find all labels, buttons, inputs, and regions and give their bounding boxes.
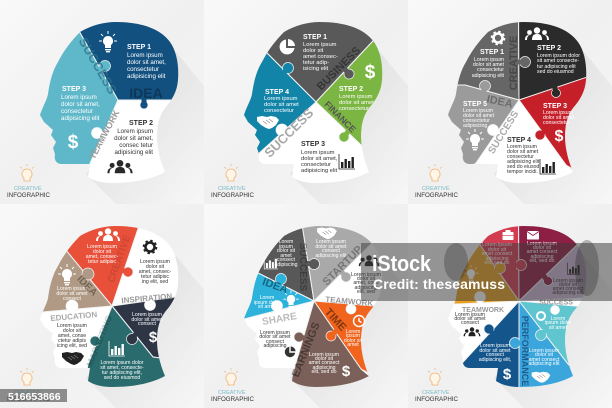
step 3 text: Lorem ipsum (543, 110, 573, 116)
step 1 text: consectetur (477, 67, 504, 73)
text: cyan segment: ipsum dolor (545, 320, 572, 326)
logo: creative infographic (211, 368, 255, 403)
step 4 text: Lorem ipsum (507, 144, 537, 150)
text: dark gray segment: dolor sit (277, 248, 296, 254)
text: white left segment: Lorem ipsum (260, 330, 290, 336)
logo: creative infographic (415, 368, 459, 403)
text: tan segment: consect (63, 296, 81, 302)
text: orange segment: amet (347, 342, 359, 348)
icon: bulb (466, 129, 484, 150)
step 3 text: consectetur (301, 162, 331, 168)
icon: dollar: $ (149, 329, 158, 346)
word: SUCCESS: SUCCESS (76, 35, 120, 97)
text: red segment: Lorem ipsum (87, 244, 117, 250)
icon: gear (144, 241, 156, 253)
watermark: credit: Credit: theseamuss (373, 276, 505, 292)
text: dark gray segment: consect (277, 257, 295, 263)
word: IDEA: IDEA (74, 274, 99, 299)
text: white left segment: dolor sit (63, 328, 82, 334)
text: blue segment: Lorem ipsum (529, 348, 559, 354)
step 2 text: consec tetur (119, 142, 153, 149)
icon: ring (537, 312, 545, 320)
text: white right segment: adipiscing (354, 285, 378, 291)
text: teal segment: tur adipiscing elit, (102, 370, 142, 376)
step 5 text: consectetur (463, 118, 490, 124)
step 1 text: amet consec- (303, 54, 338, 60)
step 1 text: STEP 1 (127, 44, 151, 51)
text: white left segment: consect (266, 339, 284, 345)
panel: three-step head (8, 22, 204, 202)
step 1 text: dolor sit amet, (127, 59, 166, 66)
panel: six-segment head (8, 226, 204, 406)
step 2 text: Lorem ipsum dolor (537, 53, 580, 59)
text: white segment: consect (461, 320, 479, 326)
watermark: iStock: iStock (372, 251, 432, 276)
step 2 text: STEP 2 (129, 120, 153, 127)
text: cyan segment: Lorem (551, 316, 565, 322)
text: white right segment: Lorem ipsum (140, 259, 170, 265)
word: SHARE: SHARE (261, 311, 298, 328)
panel: eight-segment head (416, 226, 603, 406)
icon: bulb (58, 264, 76, 285)
text: white left segment: amet, conse (58, 333, 86, 339)
text: white right segment: tetur adipisc (141, 274, 169, 280)
text: brown segment: elit, sed do (311, 369, 337, 375)
text: dark gray segment: adipiscing (274, 262, 298, 268)
step 2 text: dolor sit amet, (114, 135, 153, 142)
step 5 text: STEP 5 (463, 101, 487, 108)
step 1 text: dolor sit (303, 48, 324, 54)
text: maroon segment: amet consect (527, 249, 558, 255)
icon: bars (568, 263, 580, 275)
icon: dollar: $ (365, 62, 376, 83)
word: SUCCESS: SUCCESS (261, 105, 317, 160)
icon: people (464, 327, 480, 336)
panel: seven-segment head (212, 226, 399, 406)
step 2 text: Lorem ipsum (117, 128, 153, 135)
text: red segment: adipiscing (485, 256, 509, 262)
step 4 text: Lorem ipsum (264, 96, 298, 102)
text: blue segment: dolor sit (535, 352, 554, 358)
word: SUCCESS: SUCCESS (486, 109, 522, 156)
text: blue segment: adipiscing elit (528, 361, 560, 367)
word: EDUCATION: EDUCATION (50, 310, 98, 323)
step 5 text: adipisicing (463, 123, 487, 129)
icon: dollar: $ (503, 366, 512, 383)
step 1 text: tetur adip- (303, 60, 329, 66)
watermark: image id: 516653866 (8, 391, 61, 403)
text: white right segment: elit, sed (357, 289, 375, 295)
word: IDEA: IDEA (261, 276, 289, 296)
icon: people (107, 160, 133, 173)
text: maroon segment: dolor sit (533, 245, 552, 251)
icon: pie chart (285, 346, 296, 357)
text: brown segment: amet consect (309, 360, 340, 366)
icon: people (359, 255, 379, 266)
text: navy segment: dolor sit amet (479, 348, 511, 354)
text: maroon segment: adipiscing (530, 254, 554, 260)
text: dark gray segment: Lorem (279, 239, 293, 245)
word: TEAMWORK: TEAMWORK (462, 307, 504, 314)
text: navy segment: dolor sit amet (131, 317, 163, 323)
step 2 text: sed do eiusmod (537, 69, 574, 75)
text: white left segment: adipiscing (263, 343, 287, 349)
step 1 text: adipisicing elit (127, 73, 166, 80)
step 1 text: Lorem ipsum (474, 57, 504, 63)
text: blue segment: sit amet (258, 304, 277, 310)
text: red segment: Lorem ipsum (482, 242, 512, 248)
step 1 text: adipisicing elit (472, 73, 505, 79)
step 4 text: dolor sit amet (264, 102, 299, 108)
text: red segment: dolor sit (488, 247, 507, 253)
text: teal segment: Lorem ipsum dolor (101, 360, 144, 366)
word: IDEA: IDEA (486, 93, 514, 111)
text: light gray segment: dolor sit amet (315, 244, 347, 250)
step 4 text: sed do eiusod (507, 164, 539, 170)
text: tan segment: dolor sit amet (56, 291, 88, 297)
step 1 text: isicing elit (303, 66, 329, 72)
step 4 text: consectetur (264, 108, 294, 114)
watermark band (361, 240, 612, 301)
icon: bars (540, 159, 556, 174)
word: SUCCESS: SUCCESS (539, 300, 573, 306)
text: red segment: tetur adipisc (88, 259, 116, 265)
step 3 text: consectetur (61, 108, 93, 115)
icon: bulb (464, 265, 478, 282)
text: blue segment: amet consect (529, 357, 560, 363)
icon: handshake (532, 372, 550, 383)
text: white left segment: dolor sit amet (259, 334, 291, 340)
logo: creative infographic (7, 368, 51, 403)
icon: gear (492, 32, 504, 44)
step 1 text: STEP 1 (480, 49, 504, 56)
text: maroon segment: elit, sed do (529, 258, 555, 264)
text: navy segment: Lorem ipsum (480, 343, 510, 349)
text: teal segment: sit amet, consecte- (100, 365, 144, 371)
logo: creative infographic (415, 164, 459, 199)
step 5 text: dolor sit amet (463, 113, 495, 119)
icon: bars (264, 256, 278, 269)
step 1 text: Lorem ipsum (303, 42, 337, 48)
icon: briefcase (502, 230, 514, 240)
text: tan segment: Lorem ipsum (57, 286, 87, 292)
text: white left segment: ctetur adipis (58, 338, 86, 344)
icon: bars (109, 341, 125, 356)
step 1 text: dolor sit amet (473, 62, 505, 68)
word: EARNINGS: EARNINGS (290, 321, 323, 379)
icon: people (525, 27, 549, 40)
text: white right segment: dolor sit (357, 276, 376, 282)
text: orange segment: Lorem (346, 329, 360, 335)
step 2 text: STEP 2 (537, 45, 561, 52)
step 3 text: Lorem ipsum (61, 94, 97, 101)
icon: dollar: $ (68, 132, 79, 153)
text: red segment: amet, consec- (86, 254, 119, 260)
step 3 text: STEP 3 (301, 141, 325, 148)
step 4 text: consectetur (507, 154, 534, 160)
word: CREATIVE: CREATIVE (508, 36, 520, 90)
icon: handshake (62, 352, 84, 365)
word: SUCCESS: SUCCESS (297, 243, 308, 291)
text: white segment: dolor sit amet (454, 316, 486, 322)
logo: creative infographic (211, 164, 255, 199)
step 2 text: STEP 2 (339, 86, 363, 93)
text: light gray segment: consect (322, 248, 340, 254)
icon: clock (354, 316, 364, 326)
text: purple segment: adipiscing elit (552, 290, 584, 296)
icon: mail (527, 231, 539, 240)
text: blue segment: Lorem (260, 295, 274, 301)
step 3 text: dolor sit amet, (61, 101, 100, 108)
text: brown segment: dolor sit (315, 356, 334, 362)
text: white right segment: ing elit, sed (142, 279, 168, 285)
word: BUSINESS: BUSINESS (315, 45, 363, 93)
word: MARKETING: MARKETING (84, 314, 114, 368)
text: navy segment: adipiscing elit, (479, 357, 511, 363)
icon: handshake (317, 228, 337, 239)
icon: dollar: $ (555, 128, 564, 145)
text: white left segment: Lorem ipsum (57, 323, 87, 329)
step 3 text: adipisicing elit (61, 115, 100, 122)
text: orange segment: dolor sit (344, 338, 363, 344)
text: navy segment: consect (138, 321, 156, 327)
text: purple segment: dolor sit (559, 282, 578, 288)
step 3 text: dolor sit amet (543, 115, 575, 121)
text: light gray segment: adipiscing elit (315, 253, 347, 259)
step 2 text: tur adipiscing elit (537, 64, 576, 70)
panel: four-step head (212, 22, 408, 202)
text: navy segment: Lorem ipsum (132, 312, 162, 318)
step 3 text: STEP 3 (543, 103, 567, 110)
icon: handshake (257, 116, 279, 129)
step 3 text: consectetur (543, 120, 570, 126)
text: blue segment: ipsum dolor (254, 300, 281, 306)
text: red segment: dolor sit (93, 249, 112, 255)
panel: five-step head (416, 22, 612, 202)
icon: dollar: $ (342, 363, 351, 380)
word: FINANCE: FINANCE (322, 99, 358, 135)
step 1 text: Lorem ipsum (127, 52, 163, 59)
step 4 text: dolor sit amet (507, 149, 539, 155)
step 3 text: STEP 3 (62, 86, 86, 93)
text: purple segment: amet consect (553, 286, 584, 292)
step 1 text: STEP 1 (303, 34, 327, 41)
text: red segment: elit, sed do (484, 260, 510, 266)
icon: bulb (283, 291, 299, 309)
text: dark gray segment: ipsum (279, 244, 293, 250)
word: INSPIRATION: INSPIRATION (121, 292, 173, 305)
icon: bars (339, 154, 355, 169)
word: TEAMWORK: TEAMWORK (87, 108, 122, 161)
step 4 text: adipisicing elit (507, 159, 540, 165)
word: PERFORMANCE: PERFORMANCE (520, 316, 530, 386)
icon: people (96, 228, 120, 241)
watermark: image id (0, 389, 67, 403)
text: cyan segment: sit amet (549, 325, 568, 331)
step 4 text: STEP 4 (507, 137, 531, 144)
text: dark gray segment: amet (280, 253, 292, 259)
text: purple segment: Lorem ipsum (553, 278, 583, 284)
step 2 text: Lorem ipsum (339, 94, 373, 100)
text: light gray segment: Lorem ipsum (316, 239, 346, 245)
step 4 text: STEP 4 (265, 89, 289, 96)
text: brown segment: adipiscing (312, 365, 336, 371)
word: STARTUP: STARTUP (321, 244, 365, 288)
icon: pie chart (280, 39, 295, 54)
text: navy segment: consect (486, 352, 504, 358)
text: red segment: amet consect (482, 251, 513, 257)
word: TEAMWORK: TEAMWORK (325, 295, 374, 308)
step 2 text: dolor sit amet (339, 100, 374, 106)
step 5 text: Lorem ipsum (463, 108, 493, 114)
step 3 text: Lorem ipsum (301, 150, 335, 156)
text: white left segment: icing elit, sed (57, 343, 87, 349)
step 2 text: adipisicing elit (114, 149, 153, 156)
text: orange segment: ipsum (346, 333, 360, 339)
text: white right segment: dolor sit (146, 264, 165, 270)
text: brown segment: Lorem ipsum (309, 352, 339, 358)
step 2 text: consectetur (339, 106, 369, 112)
step 4 text: tempor incidi. (507, 169, 538, 175)
icon: bulb (99, 31, 117, 52)
step 1 text: consectetur (127, 66, 159, 73)
step 3 text: adipisicing elit (301, 168, 337, 174)
word: CREATIVE: CREATIVE (106, 234, 133, 284)
text: white right segment: amet, cons (353, 280, 379, 286)
text: white segment: Lorem ipsum (455, 312, 485, 318)
word: TIME: TIME (322, 306, 348, 334)
step 3 text: dolor sit amet, (301, 156, 338, 162)
text: maroon segment: Lorem ipsum (527, 241, 557, 247)
text: teal segment: sed do eiusmod (104, 375, 140, 381)
text: white right segment: Lorem ipsum (351, 272, 381, 278)
word: IDEA: IDEA (129, 85, 163, 101)
text: white right segment: amet, consec- (139, 269, 172, 275)
logo: creative infographic (7, 164, 51, 199)
step 2 text: sit amet consecte- (537, 58, 579, 64)
